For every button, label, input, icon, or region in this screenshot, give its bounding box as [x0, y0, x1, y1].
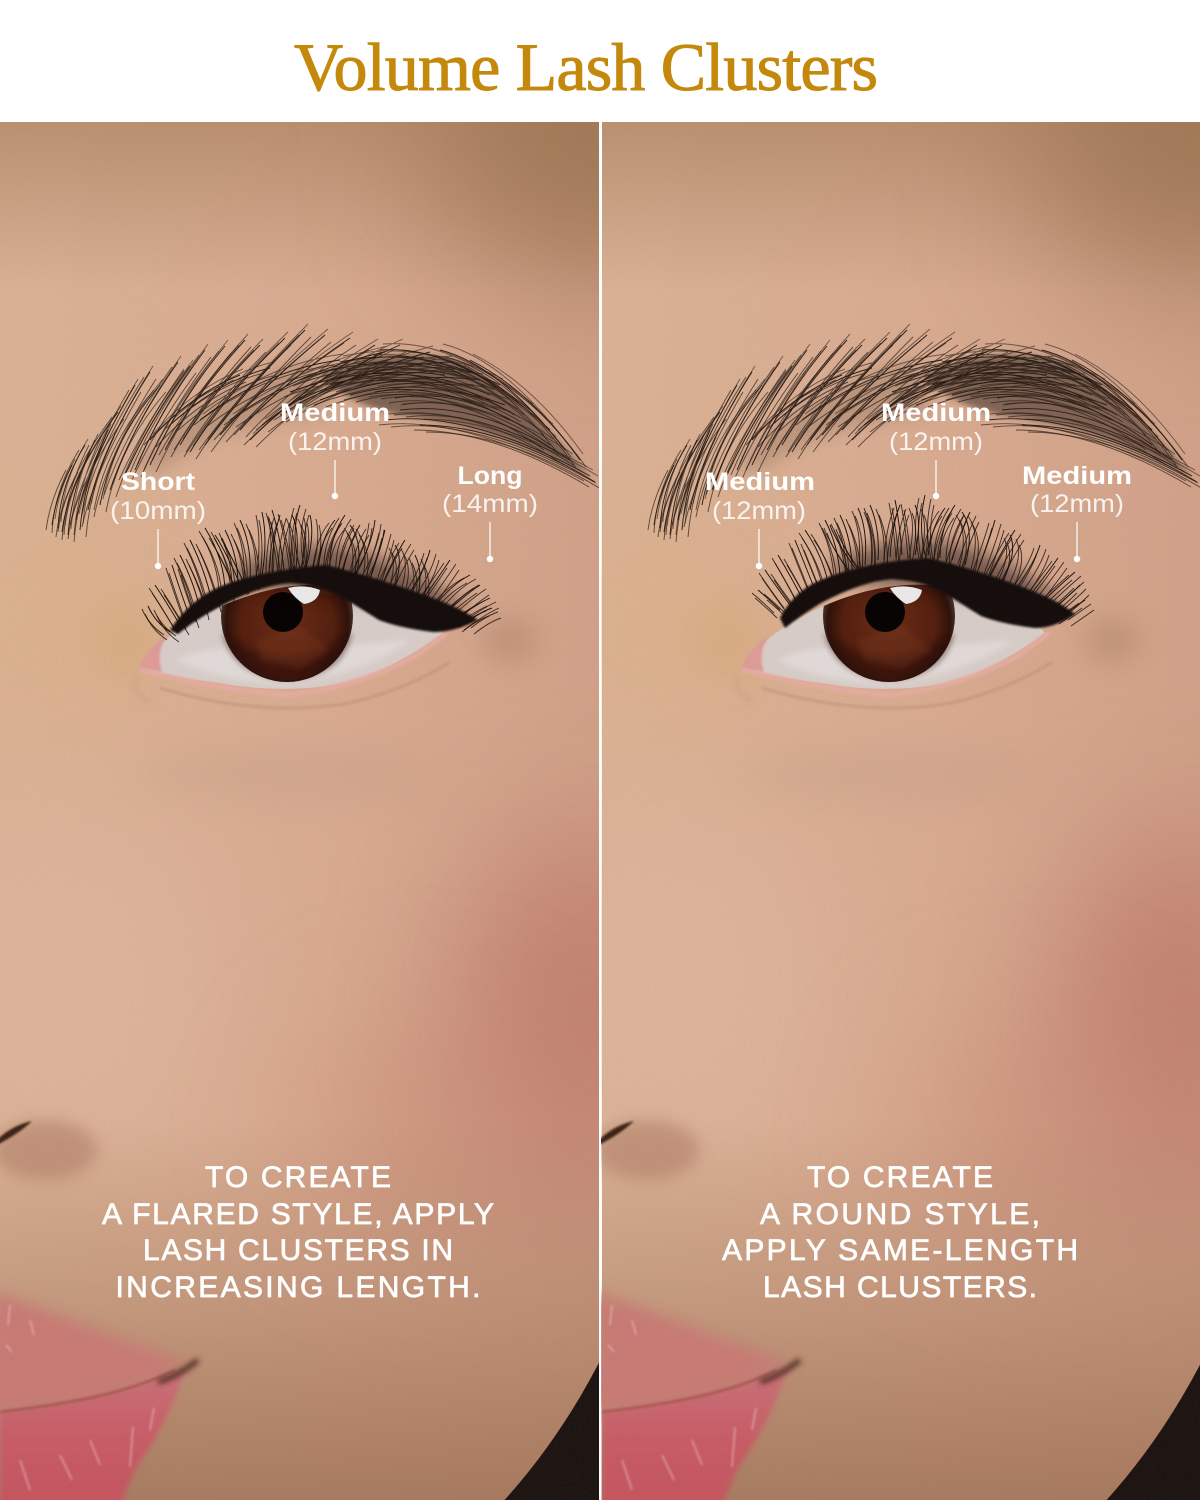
- caption: round style: [722, 1161, 1078, 1304]
- caption: round style: LASH CLUSTERS.: [763, 1271, 1037, 1304]
- caption: flared style: TO CREATE: [205, 1161, 391, 1194]
- photo: face close-up with flared lashes: [0, 122, 599, 1500]
- label: short 10mm: (10mm): [110, 497, 206, 525]
- panel: round style: [601, 122, 1200, 1500]
- label: short 10mm: Short: [121, 468, 196, 496]
- label: long 14mm: [442, 462, 538, 562]
- label: medium 12mm right: Medium: [1022, 462, 1132, 490]
- title: Volume Lash Clusters: [294, 29, 878, 105]
- caption: round style: APPLY SAME-LENGTH: [722, 1234, 1078, 1267]
- eye highlight: [288, 586, 320, 604]
- label: medium 12mm: (12mm): [288, 428, 382, 456]
- label: medium 12mm right: (12mm): [1030, 490, 1124, 518]
- label: medium 12mm right: [1022, 462, 1132, 562]
- label: medium 12mm left: (12mm): [712, 497, 806, 525]
- photo: face close-up with round lashes: [601, 122, 1200, 1500]
- label: long 14mm: (14mm): [442, 490, 538, 518]
- caption: flared style: LASH CLUSTERS IN: [143, 1234, 453, 1267]
- label: medium 12mm left: Medium: [705, 468, 815, 496]
- label: medium 12mm: Medium: [280, 399, 390, 427]
- label: short 10mm: [110, 468, 206, 569]
- label: medium 12mm: [280, 399, 390, 499]
- label: medium 12mm left: [705, 468, 815, 569]
- caption: round style: A ROUND STYLE,: [760, 1198, 1040, 1231]
- lashes: round: [752, 495, 1094, 628]
- caption: round style: TO CREATE: [807, 1161, 993, 1194]
- label: medium 12mm centre: Medium: [881, 399, 991, 427]
- eye highlight: [890, 586, 922, 604]
- label: long 14mm: Long: [458, 462, 522, 490]
- caption: flared style: INCREASING LENGTH.: [116, 1271, 480, 1304]
- lashes: flared: [142, 505, 501, 642]
- label: medium 12mm centre: [881, 399, 991, 499]
- label: medium 12mm centre: (12mm): [889, 428, 983, 456]
- caption: flared style: [102, 1161, 494, 1304]
- panel: flared style: [0, 122, 599, 1500]
- caption: flared style: A FLARED STYLE, APPLY: [102, 1198, 494, 1231]
